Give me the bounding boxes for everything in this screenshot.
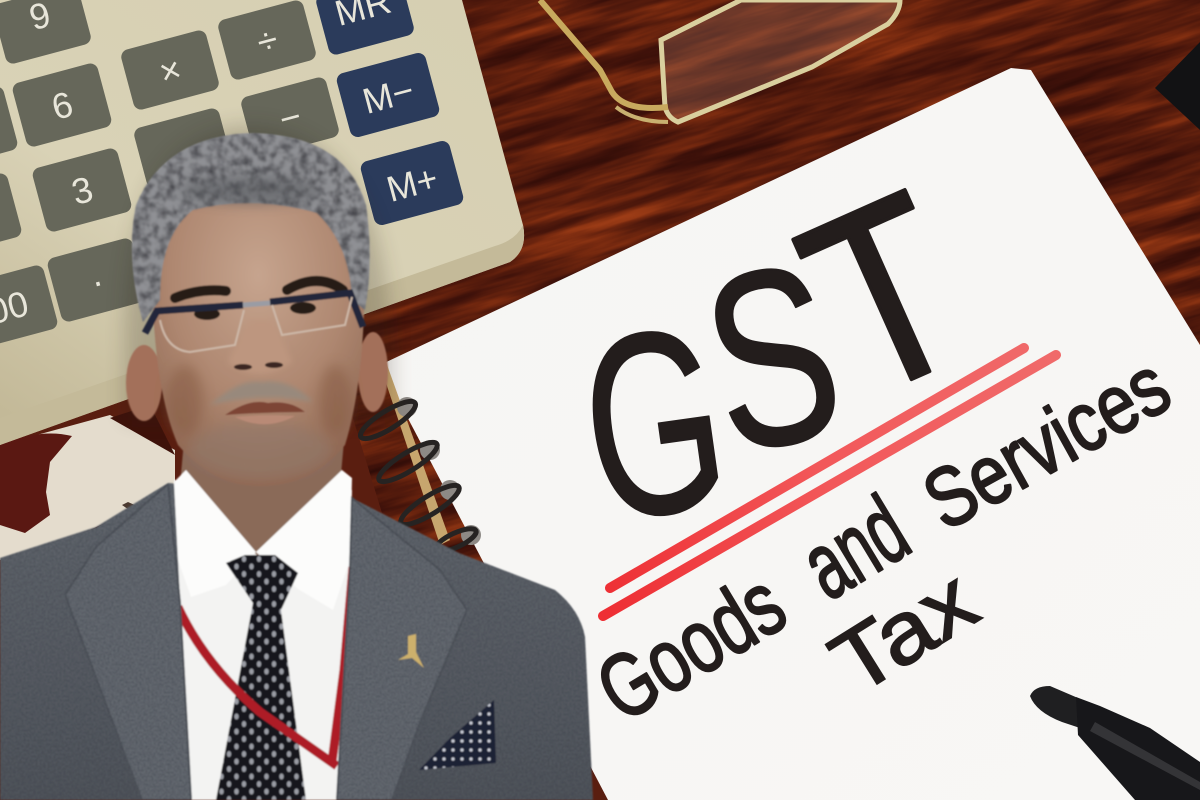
calculator keys: . bbox=[85, 253, 105, 295]
paper under the calculator bbox=[0, 405, 175, 560]
hair bbox=[132, 133, 370, 322]
calculator keys: M+ bbox=[382, 157, 442, 210]
handwritten heading: GST bbox=[566, 138, 1003, 578]
handwritten text: Goods and Services: Goods bbox=[581, 553, 802, 741]
notebook spiral binding bbox=[356, 395, 481, 556]
shirt collar bbox=[174, 470, 352, 610]
nose bbox=[228, 320, 292, 374]
handwritten heading: GST: T bbox=[767, 138, 1003, 452]
eyes bbox=[194, 302, 316, 320]
jacket lapels bbox=[65, 484, 467, 800]
calculator keys: − bbox=[275, 95, 306, 140]
shirt bbox=[174, 480, 352, 800]
soft shadow behind the man's head bbox=[125, 125, 392, 420]
eyeglasses on the desk bbox=[540, 0, 900, 122]
tie bbox=[216, 555, 306, 800]
moustache bbox=[210, 381, 313, 405]
spectacles bbox=[145, 293, 363, 352]
lapel pin bbox=[398, 634, 424, 668]
handwritten text: Tax: Tax bbox=[814, 550, 993, 713]
neck bbox=[180, 430, 345, 556]
calculator bbox=[0, 0, 524, 445]
mouth bbox=[225, 402, 305, 424]
face bbox=[152, 185, 365, 486]
man in grey suit bbox=[0, 133, 593, 800]
jacket bbox=[0, 483, 593, 800]
marker pen bbox=[1030, 686, 1200, 800]
calculator keys: M− bbox=[358, 69, 418, 122]
cheek shading bbox=[167, 365, 351, 435]
lanyard bbox=[178, 567, 353, 766]
calculator keys: 3 bbox=[67, 168, 97, 213]
black object top right bbox=[1155, 42, 1200, 130]
calculator keys: × bbox=[155, 48, 186, 93]
pocket square bbox=[419, 700, 496, 770]
red underlines bbox=[603, 348, 1056, 616]
chin stubble shading bbox=[190, 422, 330, 478]
eyebrows bbox=[175, 281, 343, 298]
handwritten text: Goods and Services: and bbox=[784, 476, 926, 620]
calculator keys bbox=[0, 0, 465, 350]
handwritten text: Goods and Services bbox=[581, 338, 1185, 741]
ears bbox=[126, 332, 388, 421]
handwritten heading: GST: S bbox=[683, 208, 862, 507]
calculator keys: 6 bbox=[47, 83, 77, 128]
handwritten heading: GST: G bbox=[566, 271, 742, 578]
hair dark shading bbox=[180, 176, 320, 204]
calculator keys: ÷ bbox=[252, 18, 282, 63]
notebook bbox=[380, 68, 1200, 800]
